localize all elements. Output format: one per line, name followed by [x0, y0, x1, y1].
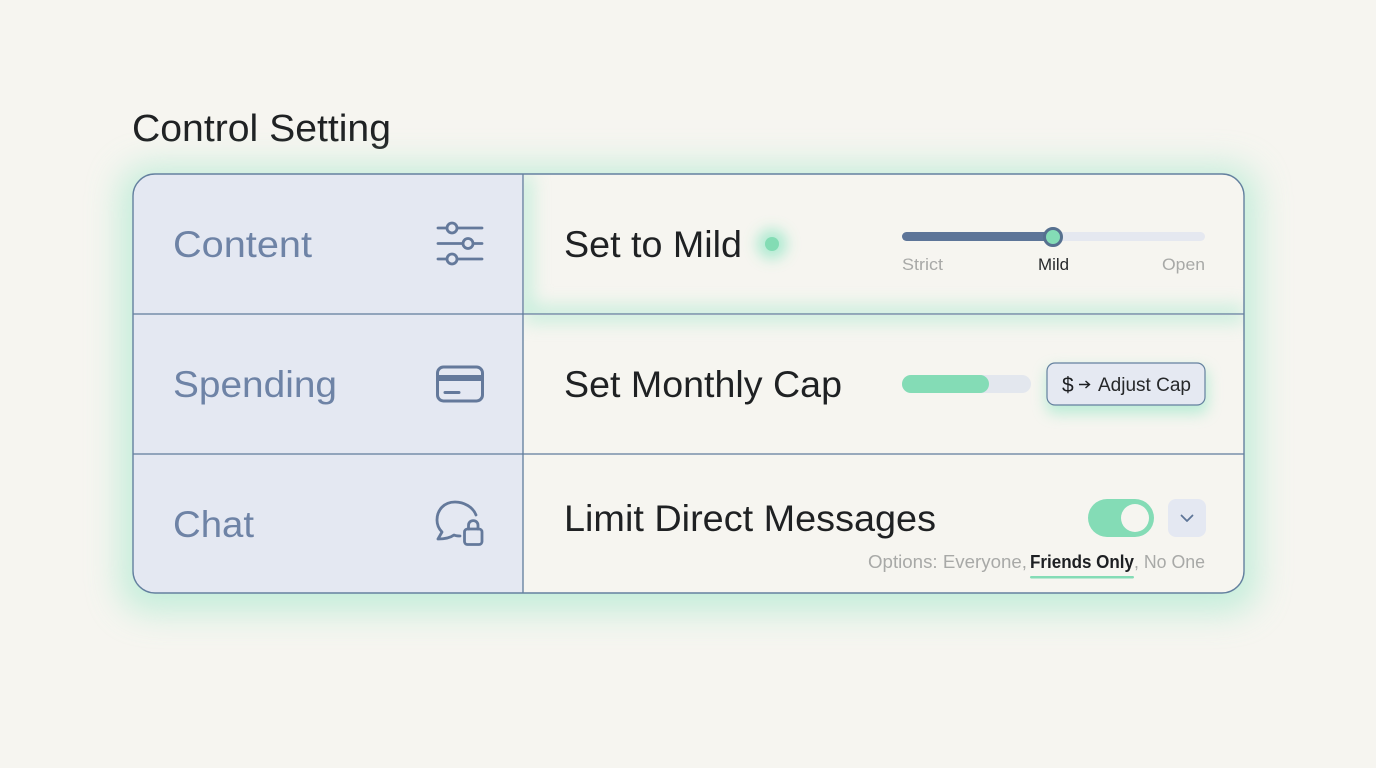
toggle switch: [1088, 499, 1154, 537]
heading: set to mild: Set to Mild: [564, 224, 742, 265]
slider labels: Strict: [902, 255, 943, 274]
button: adjust cap: $: [1062, 374, 1074, 397]
row: chat: [173, 498, 1206, 578]
icon: credit card: [438, 367, 482, 401]
selected option underline: [1030, 576, 1134, 578]
cap progress bar: [902, 375, 1031, 393]
slider labels: Open: [1162, 255, 1205, 274]
panel: settings card: [120, 166, 1257, 612]
highlight glow: monthly cap cell top: [524, 306, 1244, 322]
heading: limit direct messages: Limit Direct Messages: [564, 498, 936, 539]
card base: [133, 174, 1244, 593]
row: content: [173, 223, 1205, 274]
highlight glow: set to mild cell: [524, 175, 1244, 314]
dropdown button: [1168, 499, 1206, 537]
options text: , No One: [1134, 551, 1205, 572]
label: chat: Chat: [173, 504, 255, 545]
label: spending: Spending: [173, 364, 337, 405]
options text: Options: Everyone,: [868, 551, 1027, 572]
slider labels: [902, 255, 1205, 274]
options text: Friends Only: [1030, 551, 1135, 572]
button: adjust cap: Adjust Cap: [1098, 375, 1191, 396]
card dividers: [133, 174, 1244, 593]
slider labels: Mild: [1038, 255, 1069, 274]
button: adjust cap: [1046, 363, 1208, 414]
card border: [133, 174, 1244, 593]
label: content: Content: [173, 224, 313, 265]
icon: sliders: [438, 223, 482, 264]
title: Control Setting: [132, 108, 391, 150]
row: spending: [173, 363, 1208, 414]
card outer green glow: [120, 166, 1257, 612]
icon: chat bubble with lock: [437, 502, 482, 544]
heading: set monthly cap: Set Monthly Cap: [564, 364, 842, 405]
options text: [868, 551, 1205, 572]
left category column: [133, 174, 523, 593]
slider: [902, 228, 1205, 246]
status dot: [757, 229, 787, 259]
